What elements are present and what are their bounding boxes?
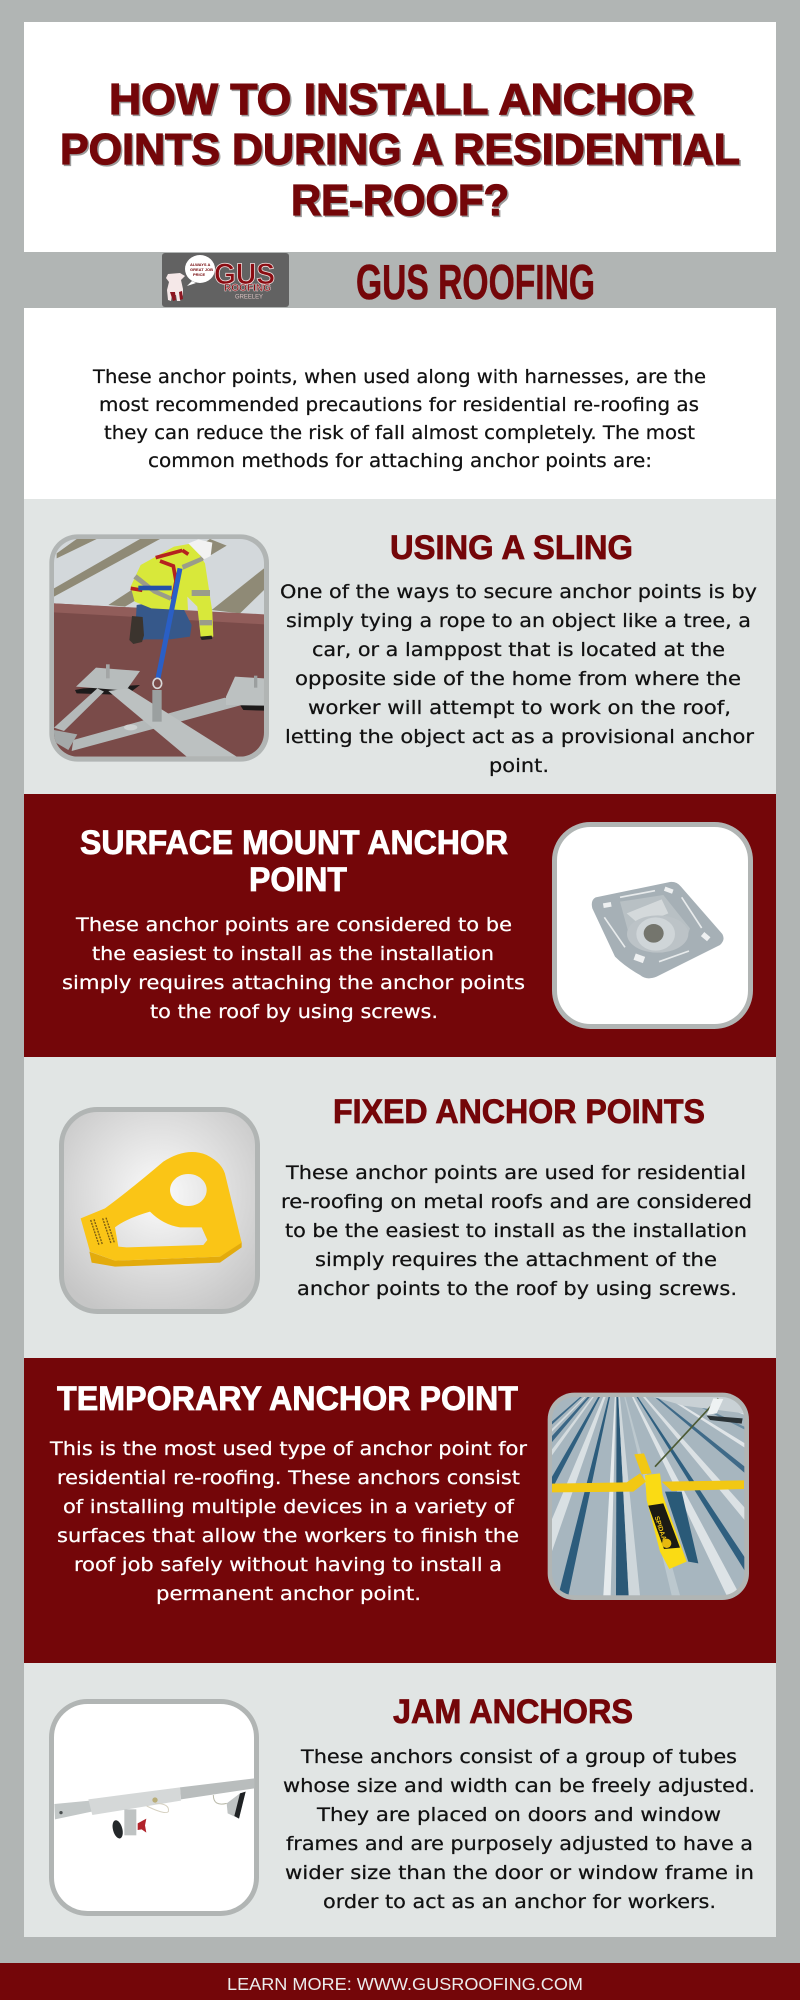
panel: using a sling xyxy=(24,499,776,794)
logo: Gus Roofing: ALWAYS A xyxy=(190,262,210,267)
body: jam anchors: wider size than the door or window frame in xyxy=(285,1862,754,1884)
title shadow: RE-ROOF? xyxy=(292,178,510,226)
body: surface mount xyxy=(62,914,525,1023)
body: temporary anchor point: residential re-roofing. These anchors consist xyxy=(57,1467,520,1489)
photo: worker with sling xyxy=(49,534,269,762)
body: fixed anchor points: These anchor points are used for residential xyxy=(285,1162,746,1184)
body: temporary anchor point: permanent anchor point. xyxy=(156,1583,421,1605)
photo: temporary anchor on metal roof xyxy=(548,1392,749,1600)
photo: fixed yellow anchor xyxy=(62,1110,258,1312)
title: HOW TO INSTALL ANCHOR xyxy=(109,75,694,124)
worker xyxy=(135,603,192,641)
body: fixed anchor points xyxy=(281,1162,752,1300)
heading: jam anchors: JAM ANCHORS xyxy=(393,1693,633,1731)
body: using a sling: point. xyxy=(489,755,549,777)
footer xyxy=(0,1963,800,2000)
intro text xyxy=(92,366,706,472)
body: using a sling: opposite side of the home from where the xyxy=(295,668,741,690)
title: RE-ROOF? xyxy=(291,176,509,225)
logo: Gus Roofing: ROOFING xyxy=(224,283,271,294)
title shadow: HOW TO INSTALL ANCHOR xyxy=(110,76,696,126)
logo: Gus Roofing: GREAT JOB xyxy=(190,267,213,272)
heading: surface mount anchor point xyxy=(80,824,508,899)
rope xyxy=(655,1398,718,1467)
title shadow xyxy=(62,76,742,226)
body: jam anchors: These anchors consist of a group of tubes xyxy=(300,1746,737,1768)
logo: Gus Roofing xyxy=(162,253,289,307)
footer link text: LEARN MORE: WWW.GUSROOFING.COM xyxy=(227,1974,583,1994)
body: using a sling: simply tying a rope to an object like a tree, a xyxy=(286,610,751,632)
body: fixed anchor points: re-roofing on metal roofs and are considered xyxy=(281,1191,752,1213)
body: surface mount: simply requires attaching the anchor points xyxy=(62,972,525,994)
body: temporary anchor point: This is the most used type of anchor point for xyxy=(49,1438,527,1460)
intro text: most recommended precautions for residential re-roofing as xyxy=(99,394,699,416)
photo: jam anchor bar xyxy=(52,1702,256,1914)
body: jam anchors xyxy=(283,1746,755,1913)
body: jam anchors: order to act as an anchor for workers. xyxy=(323,1891,716,1913)
heading: using a sling: USING A SLING xyxy=(390,529,633,567)
body: using a sling: letting the object act as a provisional anchor xyxy=(285,726,754,748)
body: surface mount: the easiest to install as the installation xyxy=(92,943,494,965)
brand name: GUS ROOFING xyxy=(356,256,595,310)
intro text: common methods for attaching anchor points are: xyxy=(148,450,652,472)
panel: introduction xyxy=(24,308,776,499)
body: using a sling xyxy=(280,581,757,777)
panel: title xyxy=(24,22,776,252)
body: jam anchors: whose size and width can be freely adjusted. xyxy=(283,1775,755,1797)
body: temporary anchor point: of installing multiple devices in a variety of xyxy=(63,1496,515,1518)
title xyxy=(60,75,740,225)
heading: fixed anchor points: FIXED ANCHOR POINTS xyxy=(333,1093,705,1131)
anchor base xyxy=(75,685,140,695)
body: temporary anchor point: roof job safely without having to install a xyxy=(74,1554,502,1576)
heading: temporary anchor point: TEMPORARY ANCHOR POINT xyxy=(57,1380,518,1418)
intro text: they can reduce the risk of fall almost completely. The most xyxy=(104,422,695,444)
panel: fixed anchor points xyxy=(24,1057,776,1358)
panel: temporary anchor point xyxy=(24,1358,800,1663)
body: fixed anchor points: to be the easiest to install as the installation xyxy=(285,1220,747,1242)
yellow anchor xyxy=(552,1473,646,1492)
heading: surface mount anchor point: POINT xyxy=(249,861,347,899)
body: fixed anchor points: anchor points to the roof by using screws. xyxy=(297,1278,737,1300)
title: POINTS DURING A RESIDENTIAL xyxy=(60,125,740,174)
panel: jam anchors xyxy=(24,1663,776,1937)
logo: Gus Roofing: GREELEY xyxy=(235,294,264,300)
body: using a sling: worker will attempt to work on the roof, xyxy=(308,697,731,719)
photo: temporary anchor on metal roof: SPIDAA xyxy=(653,1515,667,1542)
photo: surface mount bracket xyxy=(554,824,750,1026)
body: jam anchors: frames and are purposely adjusted to have a xyxy=(286,1833,753,1855)
title shadow: POINTS DURING A RESIDENTIAL xyxy=(62,126,742,176)
panel: surface mount anchor point xyxy=(24,794,776,1057)
body: using a sling: One of the ways to secure anchor points is by xyxy=(280,581,757,603)
body: jam anchors: They are placed on doors and window xyxy=(316,1804,721,1826)
body: using a sling: car, or a lamppost that is located at the xyxy=(312,639,725,661)
body: temporary anchor point xyxy=(49,1438,527,1605)
logo: Gus Roofing: PRICE xyxy=(193,272,206,277)
body: fixed anchor points: simply requires the attachment of the xyxy=(315,1249,717,1271)
logo: Gus Roofing: GUS xyxy=(214,258,275,291)
intro text: These anchor points, when used along with harnesses, are the xyxy=(92,366,706,388)
body: surface mount: These anchor points are considered to be xyxy=(75,914,512,936)
heading: surface mount anchor point: SURFACE MOUNT ANCHOR xyxy=(80,824,508,862)
body: temporary anchor point: surfaces that allow the workers to finish the xyxy=(57,1525,519,1547)
body: surface mount: to the roof by using screws. xyxy=(150,1001,438,1023)
